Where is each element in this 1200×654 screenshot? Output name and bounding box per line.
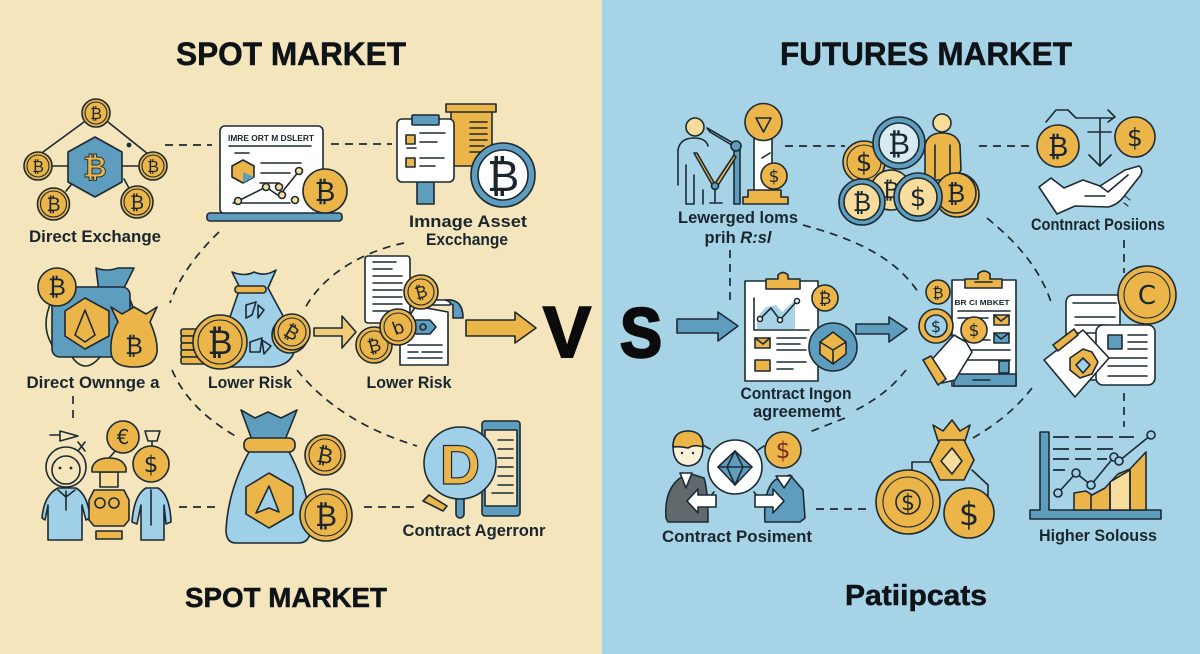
icon: coin cluster with person: $ bbox=[910, 183, 926, 213]
icon: money bag with coins: ₿ bbox=[207, 323, 233, 363]
icon: money bag with coins (bottom): ₿ bbox=[315, 443, 335, 470]
icon: wallet and money bags bbox=[38, 268, 157, 367]
icon: market report with coins and hand: $ bbox=[931, 317, 941, 336]
icon: crown token with coins bbox=[876, 420, 994, 538]
icon: money bag with coins: ₿ bbox=[280, 320, 303, 346]
label: image asset exchange bbox=[409, 213, 528, 249]
icon: two traders exchanging: $ bbox=[776, 438, 790, 464]
icon: money bag with coins (bottom): ₿ bbox=[315, 499, 337, 534]
icon: direct exchange network: ₿ bbox=[46, 194, 61, 216]
icon: coin cluster with person: ₿ bbox=[947, 179, 965, 208]
subtitle: spot market (bottom): SPOT MARKET bbox=[185, 582, 387, 613]
icon: coin cluster with person: $ bbox=[856, 148, 872, 178]
icon: direct exchange network: ₿ bbox=[90, 104, 102, 123]
label: leveraged loans: prih R:sl bbox=[704, 229, 772, 247]
icon: market report with coins and hand: $ bbox=[969, 321, 979, 341]
icon: two traders exchanging bbox=[666, 431, 805, 522]
icon: direct exchange network bbox=[24, 99, 167, 220]
icon: market report with coins and hand: ₿ bbox=[932, 284, 944, 302]
icon: direct exchange network: ₿ bbox=[83, 152, 107, 184]
icon: person with lever bbox=[678, 104, 788, 204]
icon: coins and open hand: $ bbox=[1127, 123, 1143, 152]
icon: clipboard with chart bbox=[745, 272, 857, 381]
icon: coin cluster with person: ₿ bbox=[882, 178, 900, 204]
subtitle: participants: Patiipcats bbox=[845, 580, 987, 612]
icon: coin cluster with person: ₿ bbox=[853, 188, 871, 217]
label: contract positioning: Contract Posiment bbox=[662, 528, 813, 546]
icon: coins and open hand: ₿ bbox=[1048, 130, 1068, 163]
icon: people and robot: € bbox=[117, 425, 129, 449]
label: image asset exchange: Imnage Asset bbox=[409, 213, 528, 231]
icon: crown token with coins: $ bbox=[959, 495, 979, 533]
icon: person with lever: $ bbox=[769, 167, 779, 187]
label: image asset exchange: Excchange bbox=[426, 231, 508, 249]
title: futures market: FUTURES MARKET bbox=[780, 36, 1072, 72]
icon: wallet and money bags: ₿ bbox=[48, 273, 66, 301]
label: direct exchange: Direct Exchange bbox=[29, 228, 161, 246]
icon: coins and open hand bbox=[1037, 110, 1155, 214]
icon: coin cluster with person: ₿ bbox=[888, 127, 910, 162]
icon: laptop with chart: IMRE ORT M DSLERT bbox=[228, 134, 314, 143]
label: contract signing agreement: agreememt bbox=[753, 403, 842, 421]
panel: futures market background bbox=[602, 0, 1200, 654]
arrow: blue medium bbox=[856, 317, 907, 342]
label: lower risk (right): Lower Risk bbox=[366, 374, 452, 392]
icon: documents with coins: b bbox=[390, 317, 407, 340]
icon: checklist with coin: ₿ bbox=[487, 151, 519, 202]
icon: clipboard with chart: ₿ bbox=[819, 289, 831, 309]
label: contract agreement: Contract Agerronr bbox=[402, 522, 546, 540]
icon: laptop with chart bbox=[207, 126, 347, 221]
title: spot market: SPOT MARKET bbox=[176, 36, 406, 72]
icon: cards, hand and coin: C bbox=[1138, 281, 1156, 311]
vs letter S: S bbox=[620, 294, 662, 372]
panel: spot market background bbox=[0, 0, 602, 654]
icon: cards, hand and coin bbox=[1044, 266, 1176, 397]
label: contract signing agreement: Contract Ingon bbox=[740, 385, 852, 403]
icon: magnifier and phone: D bbox=[440, 433, 480, 496]
chart: rising line and area bbox=[1030, 431, 1161, 519]
icon: people and robot bbox=[42, 421, 171, 540]
icon: direct exchange network: ₿ bbox=[32, 157, 44, 176]
icon: laptop with chart: ₿ bbox=[315, 175, 335, 208]
icon: documents with coins: ₿ bbox=[413, 282, 430, 304]
icon: documents with coins bbox=[356, 256, 463, 365]
label: direct ownership: Direct Ownnge a bbox=[26, 374, 160, 392]
icon: wallet and money bags: ₿ bbox=[125, 332, 143, 360]
arrow: gold large bbox=[466, 312, 536, 343]
icon: documents with coins: ₿ bbox=[365, 335, 384, 358]
icon: money bag with coins (bottom) bbox=[226, 410, 352, 543]
vs letter V: V bbox=[543, 293, 591, 373]
icon: direct exchange network: ₿ bbox=[130, 192, 144, 214]
icon: crown token with coins: $ bbox=[901, 491, 915, 516]
label: contract signing agreement bbox=[740, 385, 852, 421]
label: contract positions: Contnract Posiions bbox=[1031, 216, 1165, 234]
label: lower risk (centre): Lower Risk bbox=[208, 374, 293, 392]
icon: magnifier and phone bbox=[423, 421, 520, 518]
icon: market report with coins and hand: BR CI MBKET bbox=[954, 298, 1010, 307]
icon: direct exchange network: ₿ bbox=[147, 157, 159, 176]
icon: money bag with coins bbox=[181, 270, 310, 369]
icon: coin cluster with person bbox=[839, 114, 979, 225]
icon: people and robot: $ bbox=[144, 452, 158, 478]
arrow: gold small bbox=[314, 316, 356, 348]
icon: market report with coins and hand bbox=[919, 271, 1016, 386]
icon: checklist with coin bbox=[397, 104, 535, 207]
label: leveraged loans: Lewerged loms bbox=[678, 209, 798, 227]
label: higher solutions: Higher Solouss bbox=[1039, 527, 1157, 545]
arrow: blue large bbox=[677, 312, 738, 341]
label: leveraged loans bbox=[678, 209, 798, 247]
